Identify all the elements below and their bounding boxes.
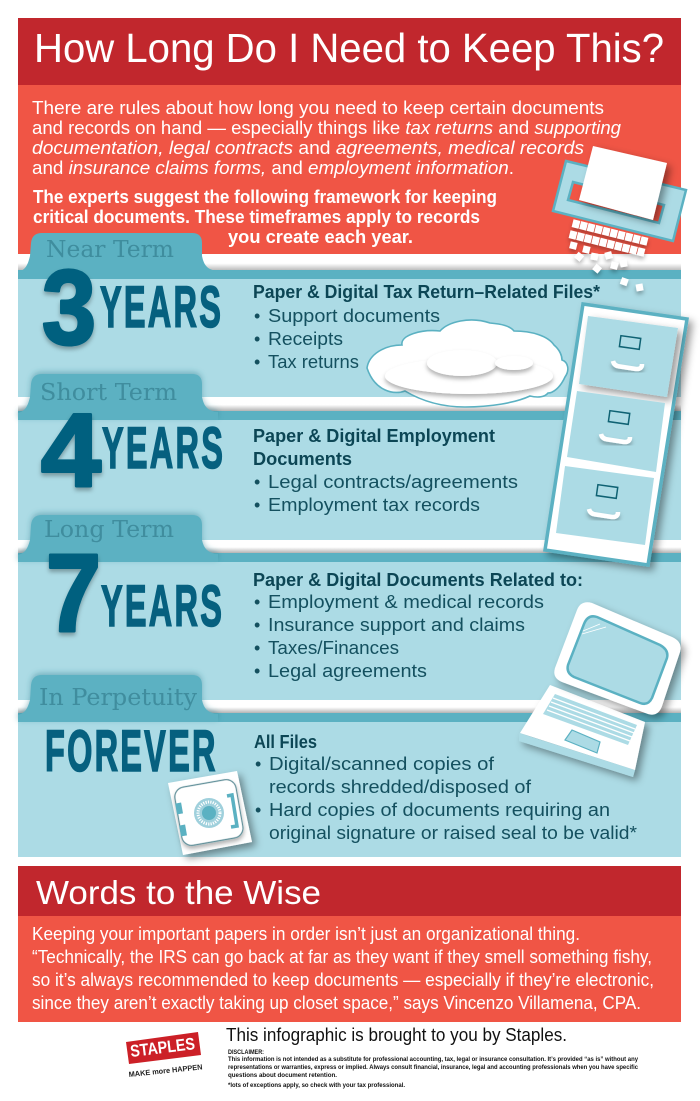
list: employment documents: Employment tax records	[268, 495, 480, 515]
tab: in perpetuity: In Perpetuity	[39, 685, 197, 711]
list: related documents: Insurance support and claims	[268, 615, 525, 635]
intro paragraph: and insurance claims forms, and employment information .	[32, 158, 514, 178]
framework statement	[33, 187, 497, 247]
section: 3 years	[42, 249, 600, 372]
logo: staples: STAPLES	[129, 1034, 196, 1061]
laptop base	[519, 685, 645, 777]
icon: laptop	[519, 602, 681, 777]
disclaimer: *lots of exceptions apply, so check with your tax professional.	[228, 1082, 405, 1089]
disclaimer: This information is not intended as a substitute for professional accounting, tax, legal or insurance consultation. It’s provided “as is” without any	[228, 1056, 638, 1063]
tab: long term: Long Term	[44, 517, 174, 543]
drawer 1	[579, 316, 678, 397]
list: tax files	[253, 282, 600, 372]
forever label: FOREVER	[45, 718, 218, 783]
list: all files	[254, 732, 637, 843]
list: all files: •	[255, 754, 261, 774]
list: all files: All Files	[254, 732, 317, 752]
section: 7 years	[46, 532, 583, 681]
list: tax files: •	[254, 306, 260, 326]
intro paragraph: documentation, legal contracts and agreements, medical records	[32, 138, 584, 158]
icon: cloud	[367, 320, 568, 407]
heading band: Words to the Wise	[36, 874, 321, 911]
list: all files: •	[255, 800, 261, 820]
quote text: so it’s always recommended to keep documents — especially if they’re electronic,	[32, 970, 654, 990]
drawer 3	[556, 466, 654, 545]
panel: file folder background	[18, 254, 681, 857]
disclaimer: representations or warranties, express or implied. Always consult financial, insurance, legal and accounting professionals when you have specific	[228, 1064, 638, 1071]
years label: YEARS	[101, 573, 224, 638]
list: all files: original signature or raised seal to be valid*	[269, 823, 637, 843]
list: related documents: Taxes/Finances	[268, 638, 399, 658]
icon: safe	[168, 771, 252, 855]
logo: staples: MAKE more HAPPEN	[128, 1062, 203, 1079]
quote text	[18, 916, 681, 1022]
tab: short term: Short Term	[40, 380, 177, 406]
intro paragraph: There are rules about how long you need to keep certain documents	[32, 98, 604, 118]
quote text: Keeping your important papers in order isn’t just an organizational thing.	[32, 924, 580, 944]
list: all files: records shredded/disposed of	[269, 777, 532, 797]
heading band	[18, 866, 681, 916]
section: 4 years	[41, 393, 518, 515]
tab: short term	[18, 374, 218, 420]
list: related documents: •	[254, 615, 260, 635]
list: all files: Hard copies of documents requiring an	[269, 800, 610, 820]
list: tax files: Support documents	[268, 306, 440, 326]
list: tax files: Receipts	[268, 329, 343, 349]
list: employment documents: Paper & Digital Employment	[253, 426, 495, 446]
list: tax files: Paper & Digital Tax Return–Related Files*	[253, 282, 600, 302]
list: related documents: Paper & Digital Documents Related to:	[253, 570, 583, 590]
tab: near term	[18, 233, 218, 279]
intro paragraph	[32, 98, 621, 178]
framework statement: critical documents. These timeframes apply to records	[33, 207, 480, 227]
title banner: How Long Do I Need to Keep This?	[34, 25, 664, 71]
tab: long term	[18, 515, 218, 562]
sponsor line: This infographic is brought to you by Staples.	[226, 1025, 567, 1045]
years label: YEARS	[100, 274, 223, 339]
framework statement: you create each year.	[228, 227, 413, 247]
list: tax files: •	[254, 329, 260, 349]
numeral 4: 4	[41, 393, 101, 509]
icon: file cabinet	[545, 304, 687, 565]
disclaimer	[228, 1049, 638, 1089]
list: related documents	[253, 570, 583, 681]
laptop screen	[554, 602, 681, 715]
list: employment documents	[253, 426, 518, 515]
list: related documents: Legal agreements	[268, 661, 427, 681]
quote text: “Technically, the IRS can go back at far as they want if they smell something fishy,	[32, 947, 652, 967]
disclaimer: questions about document retention.	[228, 1072, 337, 1079]
list: employment documents: Legal contracts/agreements	[268, 472, 518, 492]
logo: staples	[126, 1032, 203, 1079]
tab: near term: Near Term	[46, 237, 174, 263]
list: all files: Digital/scanned copies of	[269, 754, 495, 774]
intro paragraph: and records on hand — especially things like tax returns and supporting	[32, 118, 621, 138]
panel: words to the wise	[18, 866, 681, 1022]
list: related documents: •	[254, 592, 260, 612]
numeral 3: 3	[42, 249, 96, 367]
list: related documents: •	[254, 661, 260, 681]
list: employment documents: •	[254, 495, 260, 515]
drawer 2	[567, 391, 665, 472]
years label: YEARS	[102, 415, 225, 480]
list: tax files: Tax returns	[268, 352, 359, 372]
panel: introduction	[18, 85, 681, 255]
list: employment documents: Documents	[253, 449, 352, 469]
quote text: since they aren’t exactly taking up closet space,” says Vincenzo Villamena, CPA.	[32, 993, 641, 1013]
framework statement: The experts suggest the following framework for keeping	[33, 187, 497, 207]
list: employment documents: •	[254, 472, 260, 492]
section: forever	[45, 718, 637, 843]
list: tax files: •	[254, 352, 260, 372]
icon: shredder	[553, 146, 686, 291]
numeral 7: 7	[46, 532, 101, 655]
disclaimer: DISCLAIMER:	[228, 1049, 264, 1056]
list: related documents: •	[254, 638, 260, 658]
list: related documents: Employment & medical records	[268, 592, 544, 612]
title banner	[18, 18, 681, 85]
tab: in perpetuity	[18, 675, 218, 722]
